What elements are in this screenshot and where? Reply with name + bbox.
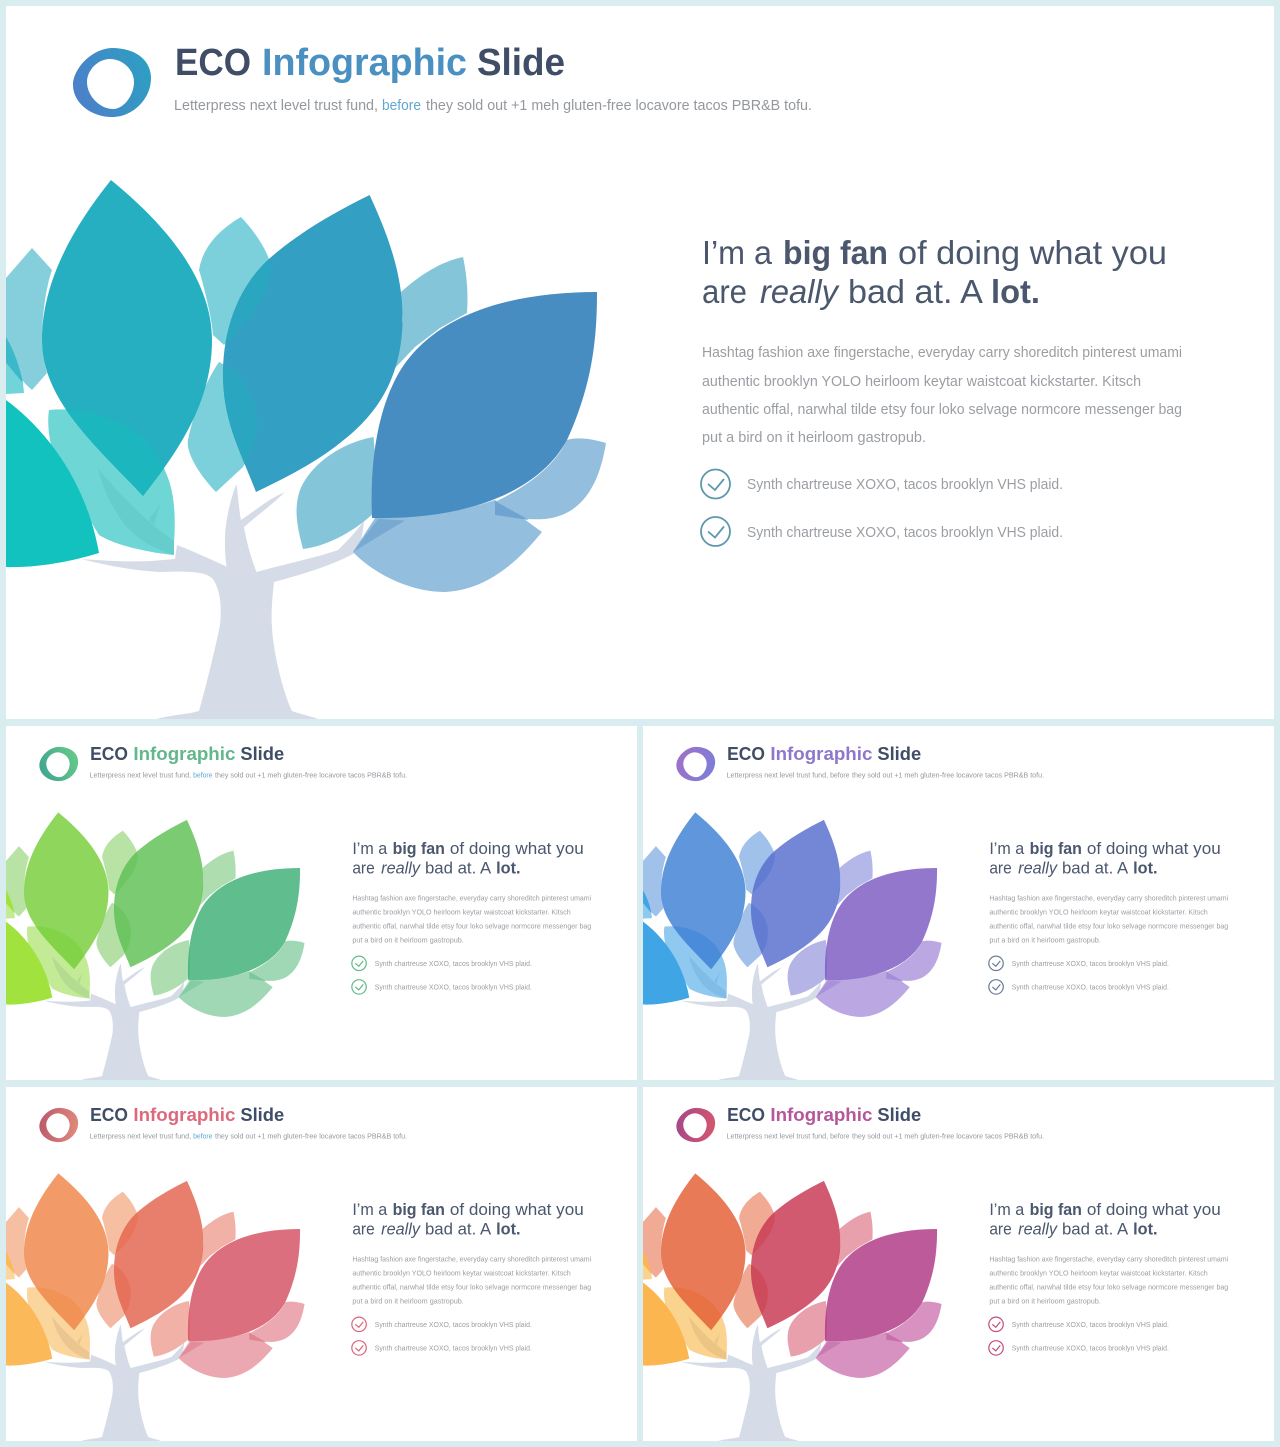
headline: of doing what you xyxy=(898,234,1167,271)
leaf: bottom right pale xyxy=(353,500,542,592)
panel: main slide, teal theme xyxy=(6,6,1274,719)
check item 1 xyxy=(352,1317,532,1332)
title: Slide xyxy=(240,744,284,765)
headline: of doing what you xyxy=(1087,840,1221,858)
check item 2 xyxy=(352,1341,532,1355)
headline line 2: really xyxy=(381,1220,422,1238)
icon: purple logo ring xyxy=(676,747,715,781)
body paragraph: authentic offal, narwhal tilde etsy four loko selvage normcore messenger bag xyxy=(989,922,1228,931)
headline: of doing what you xyxy=(450,840,584,858)
subtitle: Letterpress next level trust fund, xyxy=(727,771,828,780)
body paragraph: put a bird on it heirloom gastropub. xyxy=(352,935,464,944)
body paragraph: authentic brooklyn YOLO heirloom keytar waistcoat kickstarter. Kitsch xyxy=(702,374,1141,390)
headline line 2: really xyxy=(381,859,422,877)
leaf: large blue xyxy=(372,292,597,518)
check item 2 xyxy=(701,517,1063,546)
purple tree illustration xyxy=(643,812,942,1080)
leaf: far left xyxy=(6,248,52,390)
body paragraph: put a bird on it heirloom gastropub. xyxy=(989,935,1101,944)
headline line 2: really xyxy=(1018,1220,1059,1238)
check item 2: Synth chartreuse XOXO, tacos brooklyn VHS plaid. xyxy=(375,983,532,992)
branch seen through leaf xyxy=(98,468,174,555)
check item 1: Synth chartreuse XOXO, tacos brooklyn VHS plaid. xyxy=(1012,1320,1169,1329)
leaf: lower middle pale xyxy=(297,437,376,549)
check item 1 xyxy=(989,956,1169,971)
body paragraph xyxy=(352,893,592,944)
headline line 2: are xyxy=(352,859,375,877)
check item 2: Synth chartreuse XOXO, tacos brooklyn VHS plaid. xyxy=(1012,1344,1169,1353)
check item 2 xyxy=(989,980,1169,994)
body paragraph: authentic brooklyn YOLO heirloom keytar waistcoat kickstarter. Kitsch xyxy=(352,908,571,917)
headline line 2: bad at. A xyxy=(1062,859,1128,877)
body paragraph: Hashtag fashion axe fingerstache, everyday carry shoreditch pinterest umami xyxy=(352,893,592,902)
title: Slide xyxy=(240,1105,284,1126)
check item 1 xyxy=(352,956,532,971)
body paragraph: authentic brooklyn YOLO heirloom keytar waistcoat kickstarter. Kitsch xyxy=(989,908,1208,917)
check item 1: Synth chartreuse XOXO, tacos brooklyn VHS plaid. xyxy=(375,1320,532,1329)
body paragraph: authentic offal, narwhal tilde etsy four loko selvage normcore messenger bag xyxy=(352,922,591,931)
tree trunk xyxy=(81,484,364,719)
overlap: pale leaf seen through teal leaf xyxy=(66,410,164,496)
body paragraph: Hashtag fashion axe fingerstache, everyday carry shoreditch pinterest umami xyxy=(989,1254,1229,1263)
tree illustration xyxy=(6,180,606,719)
body paragraph: authentic offal, narwhal tilde etsy four loko selvage normcore messenger bag xyxy=(702,402,1182,418)
title: ECO xyxy=(90,744,128,765)
title: Infographic xyxy=(770,1105,872,1126)
headline line 2: lot. xyxy=(496,859,521,877)
check item 1 xyxy=(989,1317,1169,1332)
body paragraph: Hashtag fashion axe fingerstache, everyday carry shoreditch pinterest umami xyxy=(989,893,1229,902)
check item 2: Synth chartreuse XOXO, tacos brooklyn VHS plaid. xyxy=(1012,983,1169,992)
headline: big fan xyxy=(393,840,445,858)
title: Infographic xyxy=(133,1105,235,1126)
body paragraph: authentic brooklyn YOLO heirloom keytar waistcoat kickstarter. Kitsch xyxy=(989,1269,1208,1278)
headline: big fan xyxy=(1030,840,1082,858)
subtitle: before xyxy=(830,1132,850,1141)
leaf: far left lower piece xyxy=(6,363,24,394)
headline line 2: are xyxy=(989,859,1012,877)
check item 2 xyxy=(352,980,532,994)
leaf: large cerulean xyxy=(223,195,403,492)
headline line 2: bad at. A xyxy=(425,1220,491,1238)
title: Infographic xyxy=(133,744,235,765)
check item 2 xyxy=(989,1341,1169,1355)
check item 1: Synth chartreuse XOXO, tacos brooklyn VHS plaid. xyxy=(375,959,532,968)
title: Slide xyxy=(877,1105,921,1126)
icon: green logo ring xyxy=(39,747,78,781)
panel: purple theme slide xyxy=(643,726,1274,1080)
icon: magenta logo ring xyxy=(676,1108,715,1142)
leaf: large teal xyxy=(42,180,212,496)
headline line 2: are xyxy=(352,1220,375,1238)
headline line 2: lot. xyxy=(496,1220,521,1238)
subtitle: before xyxy=(193,1132,213,1141)
leaf: bottom left xyxy=(6,400,99,567)
title: Infographic xyxy=(770,744,872,765)
headline line 2: are xyxy=(989,1220,1012,1238)
headline line 2: bad at. A xyxy=(1062,1220,1128,1238)
check item 2: Synth chartreuse XOXO, tacos brooklyn VHS plaid. xyxy=(747,524,1063,541)
body paragraph: Hashtag fashion axe fingerstache, everyday carry shoreditch pinterest umami xyxy=(702,345,1182,361)
panel: magenta theme slide xyxy=(643,1087,1274,1441)
title: Infographic xyxy=(262,42,467,84)
magenta tree illustration xyxy=(643,1173,942,1441)
headline: I’m a xyxy=(989,840,1025,858)
body paragraph xyxy=(702,345,1182,446)
subtitle: Letterpress next level trust fund, xyxy=(90,1132,191,1141)
orange-red tree illustration xyxy=(6,1173,305,1441)
leaf: lower centre pale xyxy=(188,362,244,492)
leaf: right fold xyxy=(495,501,529,520)
leaf: right pale xyxy=(495,438,606,519)
headline: big fan xyxy=(1030,1201,1082,1219)
subtitle: before xyxy=(193,771,213,780)
subtitle: Letterpress next level trust fund, xyxy=(174,98,378,114)
subtitle: before xyxy=(830,771,850,780)
panel: green theme slide xyxy=(6,726,637,1080)
headline line 2: really xyxy=(1018,859,1059,877)
leaf: lower left pale xyxy=(48,409,175,555)
headline: I’m a xyxy=(702,234,773,271)
green tree illustration xyxy=(6,812,305,1080)
body paragraph: put a bird on it heirloom gastropub. xyxy=(352,1296,464,1305)
panel: orange-red theme slide xyxy=(6,1087,637,1441)
check item 2: Synth chartreuse XOXO, tacos brooklyn VHS plaid. xyxy=(375,1344,532,1353)
headline: I’m a xyxy=(989,1201,1025,1219)
body paragraph xyxy=(352,1254,592,1305)
subtitle: before xyxy=(382,98,421,114)
title: ECO xyxy=(175,42,251,84)
icon: red logo ring xyxy=(39,1108,78,1142)
leaf: far left sliver xyxy=(6,337,23,383)
leaf: top centre pale xyxy=(199,217,271,345)
headline line 2: really xyxy=(760,273,840,310)
headline: big fan xyxy=(393,1201,445,1219)
subtitle: Letterpress next level trust fund, xyxy=(727,1132,828,1141)
headline line 2: lot. xyxy=(991,273,1040,310)
title: Slide xyxy=(477,42,565,84)
body paragraph: authentic offal, narwhal tilde etsy four loko selvage normcore messenger bag xyxy=(989,1283,1228,1292)
body paragraph: Hashtag fashion axe fingerstache, everyday carry shoreditch pinterest umami xyxy=(352,1254,592,1263)
body paragraph xyxy=(989,893,1229,944)
body paragraph: authentic brooklyn YOLO heirloom keytar waistcoat kickstarter. Kitsch xyxy=(352,1269,571,1278)
headline: big fan xyxy=(783,234,888,271)
icon: logo ring xyxy=(73,48,151,117)
headline: I’m a xyxy=(352,840,388,858)
headline line 2: lot. xyxy=(1133,1220,1158,1238)
title: ECO xyxy=(727,744,765,765)
headline: of doing what you xyxy=(1087,1201,1221,1219)
title: ECO xyxy=(727,1105,765,1126)
check item 1: Synth chartreuse XOXO, tacos brooklyn VHS plaid. xyxy=(1012,959,1169,968)
subtitle: they sold out +1 meh gluten-free locavore tacos PBR&B tofu. xyxy=(215,771,407,780)
headline line 2: bad at. A xyxy=(848,273,983,310)
headline line 2: bad at. A xyxy=(425,859,491,877)
headline: of doing what you xyxy=(450,1201,584,1219)
title: Slide xyxy=(877,744,921,765)
subtitle: they sold out +1 meh gluten-free locavore tacos PBR&B tofu. xyxy=(852,771,1044,780)
headline line 2: are xyxy=(702,273,747,310)
headline line 2: lot. xyxy=(1133,859,1158,877)
title: ECO xyxy=(90,1105,128,1126)
subtitle: Letterpress next level trust fund, xyxy=(90,771,191,780)
body paragraph xyxy=(989,1254,1229,1305)
body paragraph: authentic offal, narwhal tilde etsy four loko selvage normcore messenger bag xyxy=(352,1283,591,1292)
overlap: pale leaves seen through cerulean leaf xyxy=(223,259,271,464)
leaf: bottom fold xyxy=(353,519,405,552)
body paragraph: put a bird on it heirloom gastropub. xyxy=(989,1296,1101,1305)
subtitle: they sold out +1 meh gluten-free locavore tacos PBR&B tofu. xyxy=(215,1132,407,1141)
subtitle: they sold out +1 meh gluten-free locavore tacos PBR&B tofu. xyxy=(426,98,812,114)
headline: I’m a xyxy=(352,1201,388,1219)
check item 1 xyxy=(701,470,1063,498)
leaf: upper right pale xyxy=(395,257,468,368)
check item 1: Synth chartreuse XOXO, tacos brooklyn VHS plaid. xyxy=(747,476,1063,493)
body paragraph: put a bird on it heirloom gastropub. xyxy=(702,430,926,446)
subtitle: they sold out +1 meh gluten-free locavore tacos PBR&B tofu. xyxy=(852,1132,1044,1141)
